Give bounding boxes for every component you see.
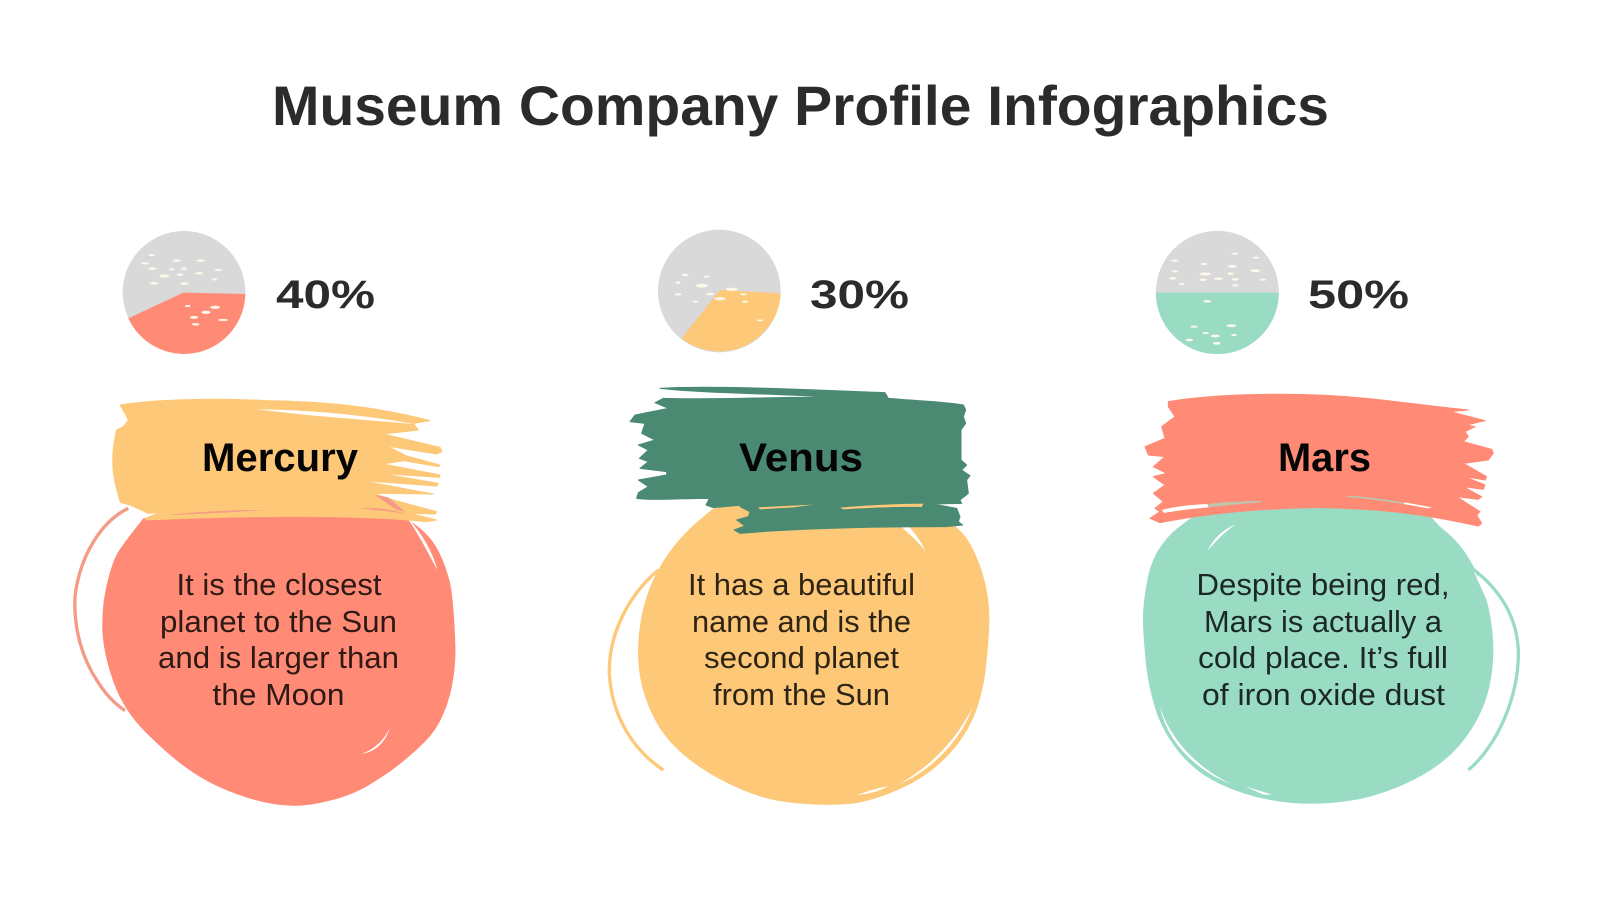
pie icon: Mercury 40% — [123, 231, 245, 354]
text block: Mercury description: the Moon — [212, 677, 344, 712]
title: Museum Company Profile Infographics — [272, 74, 1329, 137]
brush stroke banner: Venus — [630, 387, 970, 533]
text block: Mars description: cold place. It’s full — [1198, 640, 1448, 675]
percentage: 40%: 40% — [276, 273, 375, 317]
text block: Mars description: Despite being red, — [1196, 567, 1450, 602]
text block: Venus description: name and is the — [692, 604, 911, 639]
text block: Mercury description — [158, 567, 399, 712]
heading: Venus: Venus — [739, 436, 863, 480]
heading: Mars: Mars — [1278, 436, 1371, 480]
panel: Mars — [1143, 231, 1518, 804]
pie icon: Venus 30% — [658, 230, 781, 352]
panel: Venus — [609, 230, 989, 805]
paint blob: Mercury — [75, 508, 455, 806]
brush stroke banner: Mercury — [113, 399, 442, 522]
text block: Mercury description: and is larger than — [158, 640, 399, 675]
text block: Venus description: It has a beautiful — [688, 567, 915, 602]
percentage: 50%: 50% — [1308, 273, 1409, 317]
text block: Mercury description: planet to the Sun — [160, 604, 397, 639]
text block: Venus description — [688, 567, 915, 712]
pie icon: Mars 50% — [1156, 231, 1279, 354]
heading: Mercury: Mercury — [202, 436, 359, 480]
brush stroke banner: Mars — [1145, 394, 1493, 526]
percentage: 30%: 30% — [810, 273, 909, 317]
text block: Mars description: of iron oxide dust — [1202, 677, 1445, 712]
text block: Mars description: Mars is actually a — [1204, 604, 1443, 639]
paint blob: Mars — [1143, 503, 1518, 804]
panel: Mercury — [75, 231, 455, 806]
paint blob: Venus — [609, 500, 989, 805]
text block: Venus description: second planet — [704, 640, 899, 675]
text block: Venus description: from the Sun — [713, 677, 890, 712]
text block: Mars description — [1196, 567, 1450, 712]
text block: Mercury description: It is the closest — [176, 567, 382, 602]
